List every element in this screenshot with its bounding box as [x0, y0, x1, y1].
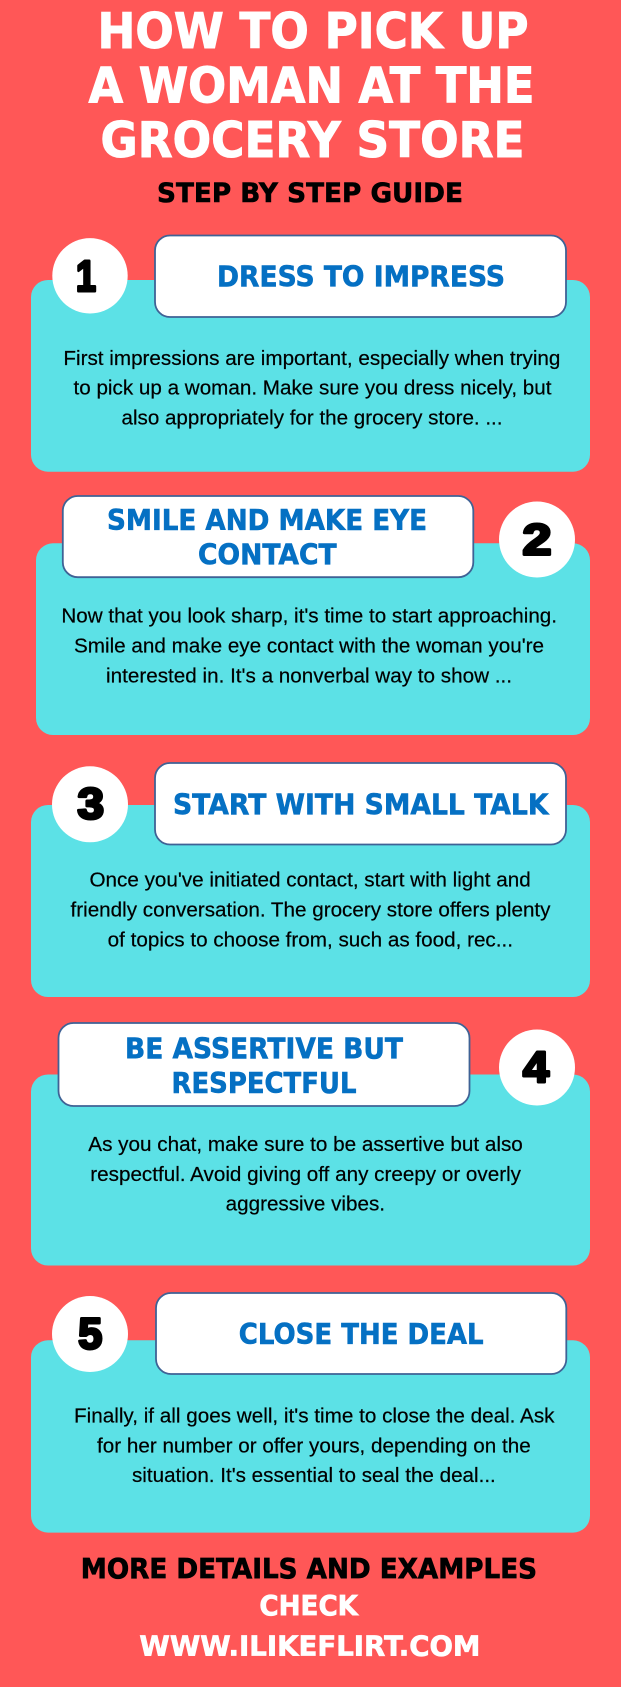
step 5 text [74, 1406, 556, 1487]
step 2 heading [63, 496, 473, 577]
step 4 text [88, 1134, 523, 1216]
step 3 number [52, 766, 128, 842]
step 1 text: also appropriately for the grocery store. ... [122, 407, 502, 429]
step 2 text: interested in. It's a nonverbal way to show ... [106, 665, 512, 687]
panel: step 5 [31, 1293, 590, 1533]
step 2 text: Now that you look sharp, it's time to start approaching. [61, 606, 557, 628]
step 1 text: to pick up a woman. Make sure you dress nicely, but [74, 378, 552, 400]
step 3 text [70, 870, 550, 952]
step 5 text: Finally, if all goes well, it's time to close the deal. Ask [74, 1406, 556, 1428]
panel: step 1 [31, 236, 590, 472]
step 2 number [499, 502, 575, 578]
step 1 number: 1 [76, 252, 96, 301]
footer: website: WWW.ILIKEFLIRT.COM [139, 1630, 480, 1662]
title: GROCERY STORE [100, 112, 524, 169]
step 1 text: First impressions are important, especially when trying [63, 348, 560, 370]
step 1 text [63, 348, 560, 429]
panel: step 3 [31, 763, 590, 997]
step 3 number: 3 [78, 780, 104, 828]
step 1 heading [155, 236, 566, 317]
step 2 heading: CONTACT [198, 539, 337, 572]
step 3 text: Once you've initiated contact, start with light and [90, 870, 531, 892]
step 2 text [61, 606, 557, 687]
panel: step 4 [31, 1023, 590, 1266]
step 3 text: friendly conversation. The grocery store offers plenty [70, 900, 550, 922]
step 4 heading [58, 1023, 470, 1106]
footer: check: CHECK [259, 1589, 359, 1622]
panel: step 2 [36, 496, 590, 735]
step 3 text: of topics to choose from, such as food, rec... [108, 930, 513, 952]
subtitle: STEP BY STEP GUIDE [157, 179, 463, 209]
step 1 heading: DRESS TO IMPRESS [217, 261, 505, 294]
step 4 text: respectful. Avoid giving off any creepy or overly [90, 1164, 521, 1186]
step 5 text: situation. It's essential to seal the deal... [132, 1465, 496, 1487]
step 4 number: 4 [523, 1043, 550, 1092]
step 3 heading [155, 763, 566, 844]
step 1 number [52, 238, 128, 314]
footer: more details: MORE DETAILS AND EXAMPLES [81, 1552, 537, 1585]
step 2 number: 2 [522, 516, 552, 564]
step 4 heading: RESPECTFUL [172, 1067, 357, 1100]
step 5 heading [156, 1293, 566, 1374]
title: A WOMAN AT THE [88, 58, 534, 114]
step 2 heading: SMILE AND MAKE EYE [107, 504, 427, 537]
step 4 heading: BE ASSERTIVE BUT [125, 1032, 404, 1065]
title: HOW TO PICK UP [98, 3, 528, 60]
step 4 text: As you chat, make sure to be assertive but also [88, 1134, 523, 1156]
step 5 number: 5 [78, 1310, 102, 1359]
title [88, 3, 534, 169]
step 5 number [52, 1296, 128, 1372]
step 2 text: Smile and make eye contact with the woman you're [74, 636, 544, 658]
step 4 number [499, 1030, 575, 1106]
step 3 heading: START WITH SMALL TALK [173, 788, 550, 821]
step 4 text: aggressive vibes. [226, 1194, 385, 1216]
step 5 text: for her number or offer yours, depending on the [97, 1436, 531, 1458]
step 5 heading: CLOSE THE DEAL [239, 1318, 484, 1351]
